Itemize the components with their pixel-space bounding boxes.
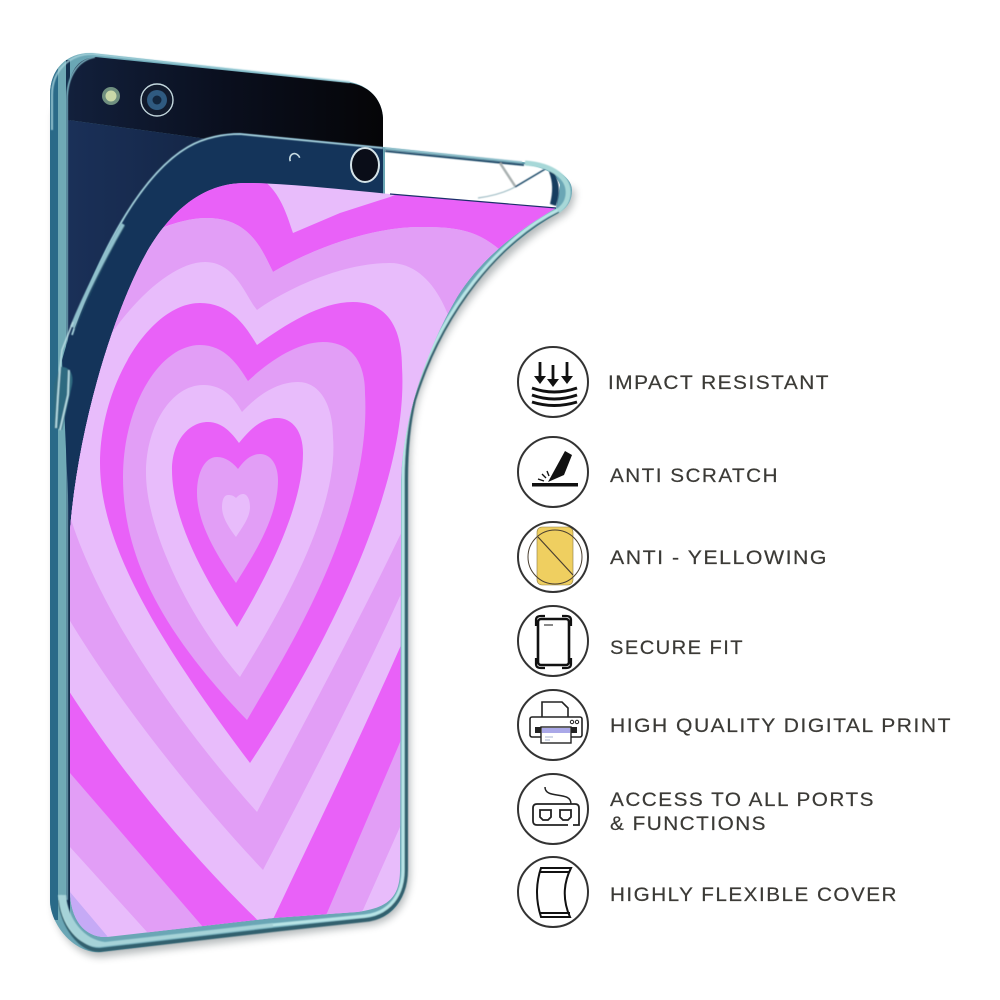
- label: & FUNCTIONS: [610, 813, 767, 835]
- flash: [102, 87, 120, 105]
- label: IMPACT RESISTANT: [608, 372, 830, 394]
- case artwork: nested hearts: [70, 183, 555, 937]
- side button: [54, 224, 125, 430]
- left rim stripes: [50, 60, 70, 920]
- feature: anti yellowing: [518, 522, 828, 592]
- back rim highlight: [52, 54, 350, 130]
- feature: ports: [518, 774, 875, 844]
- feature: flexible: [518, 857, 898, 927]
- icon: scratch: [518, 437, 588, 507]
- case corner: [525, 163, 568, 211]
- label: ANTI SCRATCH: [610, 465, 779, 487]
- label: HIGHLY FLEXIBLE COVER: [610, 884, 898, 906]
- phone with clear case: [50, 52, 579, 962]
- case tinted area: [62, 133, 383, 540]
- icon: printer: [518, 690, 588, 760]
- back glass lower: [68, 120, 383, 520]
- label: ANTI - YELLOWING: [610, 547, 828, 569]
- icon: impact: [518, 347, 588, 417]
- icon: yellowing: [518, 522, 588, 592]
- icon: flexible cover: [518, 857, 588, 927]
- phone body: [50, 53, 572, 952]
- case top edge: [72, 134, 383, 335]
- label: [610, 789, 875, 835]
- feature: digital print: [518, 690, 952, 760]
- label: HIGH QUALITY DIGITAL PRINT: [610, 715, 952, 737]
- feature: anti scratch: [518, 437, 779, 507]
- artwork top line: [390, 194, 556, 208]
- icon: ports: [518, 774, 588, 844]
- shadow: [54, 110, 575, 957]
- rim: [58, 210, 558, 950]
- feature: secure fit: [518, 606, 744, 676]
- label: SECURE FIT: [610, 637, 744, 659]
- camera: [141, 84, 173, 116]
- icon: fit: [518, 606, 588, 676]
- case hole: camera: [351, 148, 379, 182]
- case cutout: [385, 150, 560, 208]
- case hole: flash: [288, 152, 300, 161]
- back glass upper: [68, 57, 383, 163]
- feature: impact resistant: [518, 347, 830, 417]
- label: ACCESS TO ALL PORTS: [610, 789, 875, 811]
- case top line right: [385, 148, 547, 198]
